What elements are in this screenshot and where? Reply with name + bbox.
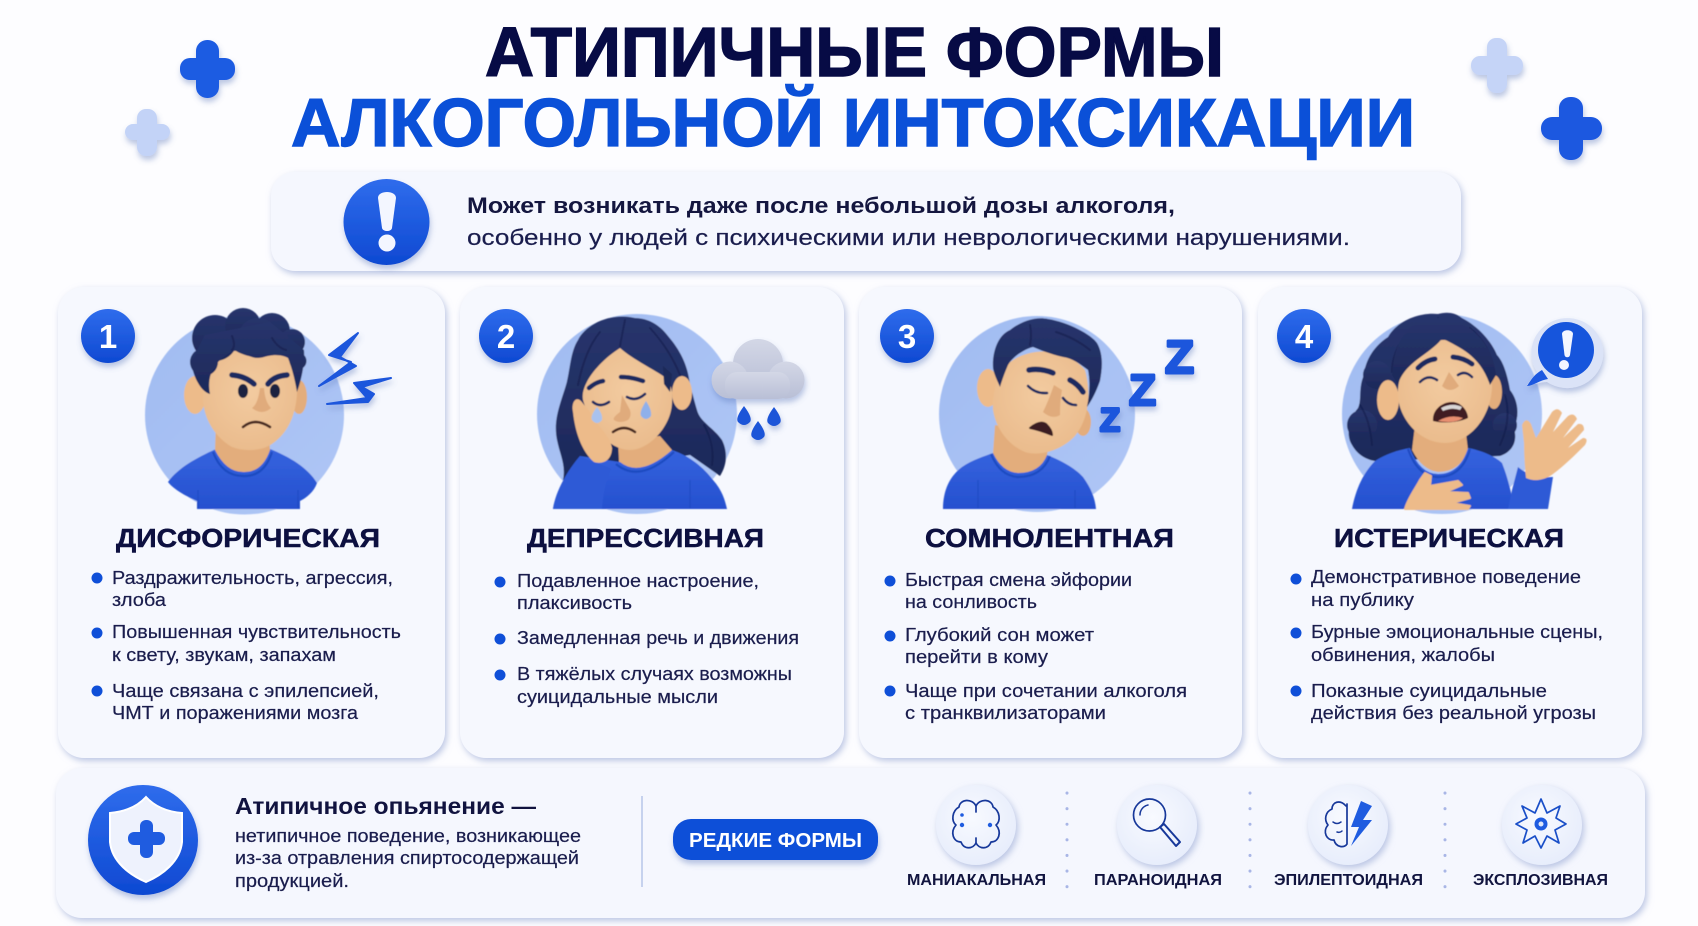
panel: card 2 depressive bbox=[460, 287, 844, 758]
bullet list bbox=[494, 571, 799, 707]
bullet list bbox=[884, 570, 1187, 723]
icon: cross light right bbox=[1471, 38, 1523, 93]
icon: speech bubble bbox=[1527, 318, 1603, 388]
button: rare forms: РЕДКИЕ ФОРМЫ bbox=[689, 829, 862, 852]
definition text: из-за отравления спиртосодержащей bbox=[235, 848, 579, 868]
bullet list: Показные суицидальные bbox=[1311, 681, 1547, 701]
bullet list: Замедленная речь и движения bbox=[517, 628, 799, 648]
badge 4 bbox=[1277, 309, 1331, 363]
definition text: Атипичное опьянение — bbox=[235, 793, 536, 819]
illustration: hysterical woman bbox=[1342, 313, 1587, 514]
panel: card 1 dysphoric bbox=[58, 287, 445, 758]
bullet list: суицидальные мысли bbox=[517, 687, 718, 707]
icon: zzz bbox=[1100, 331, 1194, 438]
panel: alert bbox=[271, 172, 1461, 271]
item: paranoid bbox=[1094, 785, 1222, 889]
illustration: crying woman bbox=[537, 314, 737, 514]
bullet list: на сонливость bbox=[905, 592, 1037, 612]
bullet list bbox=[1290, 567, 1603, 723]
icon: lightning bolts bbox=[319, 333, 391, 404]
heading: ДЕПРЕССИВНАЯ bbox=[527, 523, 764, 553]
item: epileptoid: ЭПИЛЕПТОИДНАЯ bbox=[1274, 872, 1423, 889]
definition text: продукцией. bbox=[235, 871, 349, 891]
bullet list: с транквилизаторами bbox=[905, 703, 1106, 723]
bullet list: действия без реальной угрозы bbox=[1311, 703, 1596, 723]
bullet list bbox=[92, 568, 401, 723]
bullet list: перейти в кому bbox=[905, 647, 1048, 667]
badge 3: 3 bbox=[898, 318, 916, 355]
badge 4: 4 bbox=[1295, 318, 1314, 355]
panel: bottom bar bbox=[56, 768, 1645, 918]
panel: card 3 somnolent bbox=[859, 287, 1242, 758]
icon: zzz: Z bbox=[1165, 331, 1194, 383]
item: epileptoid bbox=[1274, 785, 1423, 889]
badge 3 bbox=[880, 309, 934, 363]
bullet list: плаксивость bbox=[517, 593, 632, 613]
illustration: angry man bbox=[145, 308, 344, 514]
bullet list: Чаще связана с эпилепсией, bbox=[112, 681, 379, 701]
bullet list: Бурные эмоциональные сцены, bbox=[1311, 622, 1603, 642]
icon: zzz: Z bbox=[1129, 366, 1156, 415]
icon: cross light left bbox=[125, 109, 170, 156]
bullet list: обвинения, жалобы bbox=[1311, 645, 1495, 665]
bullet list: злоба bbox=[112, 590, 167, 610]
bullet list: Подавленное настроение, bbox=[517, 571, 759, 591]
bullet list: В тяжёлых случаях возможны bbox=[517, 664, 792, 684]
bullet list: Раздражительность, агрессия, bbox=[112, 568, 393, 588]
bullet list: к свету, звукам, запахам bbox=[112, 645, 336, 665]
title bbox=[291, 13, 1415, 161]
bullet list: Быстрая смена эйфории bbox=[905, 570, 1132, 590]
icon: exclamation bbox=[344, 179, 430, 265]
alert text bbox=[467, 193, 1350, 250]
bullet list: на публику bbox=[1311, 590, 1414, 610]
definition text bbox=[235, 793, 581, 891]
heading: ИСТЕРИЧЕСКАЯ bbox=[1334, 523, 1564, 553]
bullet list: Демонстративное поведение bbox=[1311, 567, 1581, 587]
item: manic: МАНИАКАЛЬНАЯ bbox=[907, 872, 1046, 889]
bullet list: Глубокий сон может bbox=[905, 625, 1094, 645]
item: explosive bbox=[1473, 785, 1608, 889]
badge 1 bbox=[81, 309, 135, 363]
alert text: особенно у людей с психическими или неврологическими нарушениями. bbox=[467, 225, 1350, 250]
bullet list: Чаще при сочетании алкоголя bbox=[905, 681, 1187, 701]
badge 2 bbox=[479, 309, 533, 363]
panel: card 4 hysterical bbox=[1258, 287, 1642, 758]
button: rare forms bbox=[673, 819, 878, 860]
alert text: Может возникать даже после небольшой дозы алкоголя, bbox=[467, 193, 1175, 218]
illustration: sleeping man bbox=[939, 316, 1135, 512]
title: АТИПИЧНЫЕ ФОРМЫ bbox=[485, 13, 1224, 91]
title: АЛКОГОЛЬНОЙ ИНТОКСИКАЦИИ bbox=[291, 84, 1415, 161]
bullet list: ЧМТ и поражениями мозга bbox=[112, 703, 359, 723]
badge 1: 1 bbox=[99, 318, 117, 355]
bullet list: Повышенная чувствительность bbox=[112, 622, 401, 642]
icon: zzz: Z bbox=[1100, 402, 1120, 438]
icon: cross dark right bbox=[1541, 97, 1602, 160]
icon: rain cloud bbox=[712, 339, 804, 440]
definition text: нетипичное поведение, возникающее bbox=[235, 826, 581, 846]
icon: cross dark left bbox=[180, 40, 235, 98]
item: paranoid: ПАРАНОИДНАЯ bbox=[1094, 872, 1222, 889]
badge 2: 2 bbox=[497, 318, 515, 355]
heading: СОМНОЛЕНТНАЯ bbox=[925, 523, 1174, 553]
icon: shield bbox=[88, 785, 198, 895]
heading: ДИСФОРИЧЕСКАЯ bbox=[116, 523, 380, 553]
item: manic bbox=[907, 785, 1046, 889]
item: explosive: ЭКСПЛОЗИВНАЯ bbox=[1473, 872, 1608, 889]
